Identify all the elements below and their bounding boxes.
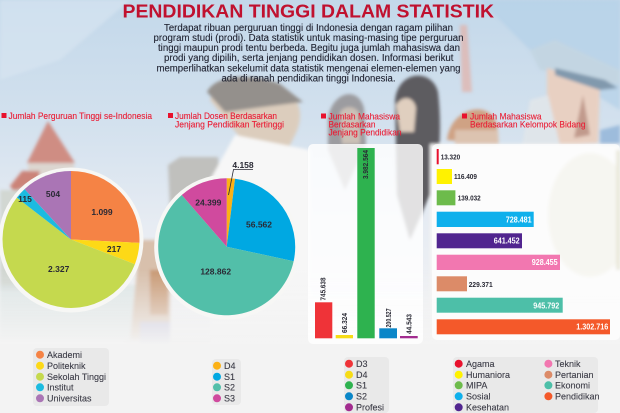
legend: jenjang pendidikan: Profesi (356, 402, 384, 412)
bar chart: kelompok bidang: 116.409 (454, 172, 477, 181)
heading: mahasiswa jenjang: Berdasarkan (328, 120, 376, 130)
white coats (430, 144, 620, 344)
title: PENDIDIKAN TINGGI DALAM STATISTIK (122, 0, 495, 22)
intro text: memperlihatkan sekelumit data statistik mengenai elemen-elemen yang (156, 64, 460, 74)
bar chart: jenjang pendidikan: 3.982.564 (361, 149, 370, 179)
legend: perguruan tinggi (33, 348, 109, 406)
pie chart: perguruan tinggi: 115 (18, 194, 32, 204)
legend: dosen (212, 359, 241, 405)
legend: kelompok bidang: Teknik (555, 359, 581, 369)
pie chart: perguruan tinggi: 1.099 (91, 207, 113, 217)
hijab students (328, 94, 366, 190)
label with leader: 4.158: 4.158 (232, 160, 254, 170)
legend: kelompok bidang: Ekonomi (555, 380, 590, 390)
legend: perguruan tinggi: Universitas (47, 394, 92, 404)
bar chart: jenjang pendidikan (308, 144, 423, 344)
heading: perguruan tinggi: Jumlah Perguruan Tinggi se-Indonesia (8, 111, 152, 121)
heading: mahasiswa bidang (462, 112, 586, 130)
pie chart: perguruan tinggi: 2.327 (48, 264, 70, 274)
heading: mahasiswa jenjang: Jenjang Pendidikan (328, 128, 402, 138)
heading: mahasiswa bidang: Jumlah Mahasiswa (470, 112, 542, 122)
heading: mahasiswa jenjang: Jumlah Mahasiswa (328, 112, 400, 122)
intro text: program studi (prodi). Data statistik untuk masing-masing tipe perguruan (154, 33, 464, 44)
bar chart: jenjang pendidikan: 745.638 (318, 278, 328, 300)
legend: jenjang pendidikan: S2 (356, 392, 367, 402)
bar chart: kelompok bidang: 945.792 (533, 301, 560, 310)
pole (460, 25, 472, 92)
intro text: ada di ranah pendidikan tinggi Indonesia. (222, 74, 396, 84)
legend: kelompok bidang: Agama (466, 359, 495, 369)
label with leader: 4.158 (228, 160, 254, 195)
pie chart: dosen: 56.562 (246, 220, 272, 230)
bar chart: kelompok bidang: 641.452 (494, 237, 520, 246)
legend: dosen: D4 (224, 361, 236, 371)
legend: kelompok bidang: Sosial (466, 392, 491, 402)
pie chart: dosen: 128.862 (200, 266, 231, 276)
legend: jenjang pendidikan: D3 (356, 359, 368, 369)
legend: perguruan tinggi: Akademi (47, 350, 82, 360)
bar chart: jenjang pendidikan: 200.527 (384, 308, 393, 328)
legend: perguruan tinggi: Sekolah Tinggi (47, 372, 106, 382)
bar chart: jenjang pendidikan: 66.324 (340, 312, 349, 333)
centre vial / bottle group (168, 157, 222, 250)
legend: jenjang pendidikan: D4 (356, 370, 368, 380)
legend: kelompok bidang (453, 357, 600, 413)
legend: jenjang pendidikan: S1 (356, 380, 367, 390)
bar chart: jenjang pendidikan: 44.543 (404, 314, 414, 334)
heading: dosen: Jenjang Pendidikan Tertinggi (175, 120, 284, 130)
legend: kelompok bidang: Kesehatan (466, 402, 509, 412)
heading: mahasiswa jenjang (321, 112, 402, 138)
legend: dosen: S2 (224, 382, 235, 392)
legend: kelompok bidang: Humaniora (466, 370, 510, 380)
bar chart: kelompok bidang: 229.371 (469, 280, 493, 289)
globe (548, 153, 620, 277)
man with cap (530, 40, 620, 85)
bar chart: kelompok bidang (432, 144, 620, 340)
legend: jenjang pendidikan (344, 357, 389, 413)
bar chart: kelompok bidang: 139.032 (458, 194, 481, 202)
intro text: Terdapat ribuan perguruan tinggi di Indonesia dengan ragam pilihan (164, 23, 453, 34)
pie chart: perguruan tinggi (0, 168, 144, 312)
pie chart: perguruan tinggi: 217 (107, 244, 121, 254)
legend: kelompok bidang: MIPA (466, 380, 487, 390)
pie chart: dosen (154, 160, 299, 320)
intro text (154, 23, 464, 84)
pie chart: perguruan tinggi: 504 (46, 189, 60, 199)
bar chart: kelompok bidang: 1.302.716 (576, 323, 609, 332)
heading: mahasiswa bidang: Berdasarkan Kelompok Bidang (470, 120, 586, 130)
intro text: tinggi maupun prodi tentu berbeda. Begitu juga jumlah mahasiswa dan (158, 43, 460, 54)
bar chart: kelompok bidang: 13.320 (441, 152, 460, 162)
legend: dosen: S3 (224, 394, 235, 404)
student with white coat (210, 84, 300, 160)
pie chart: dosen: 24.399 (195, 198, 222, 208)
legend: perguruan tinggi: Institut (47, 382, 74, 392)
legend: dosen: S1 (224, 372, 235, 382)
legend: kelompok bidang: Pertanian (555, 370, 594, 380)
bar chart: kelompok bidang: 728.481 (506, 215, 532, 224)
bar chart: kelompok bidang: 928.455 (532, 258, 558, 267)
intro text: prodi yang dipilih, serta jenjang pendidikan dosen. Informasi berikut (164, 53, 454, 64)
legend: perguruan tinggi: Politeknik (47, 361, 86, 371)
heading: dosen: Jumlah Dosen Berdasarkan (175, 111, 277, 121)
heading: dosen (168, 111, 284, 130)
bottom fade (0, 270, 620, 346)
building (27, 121, 75, 163)
legend: kelompok bidang: Pendidikan (555, 392, 600, 402)
